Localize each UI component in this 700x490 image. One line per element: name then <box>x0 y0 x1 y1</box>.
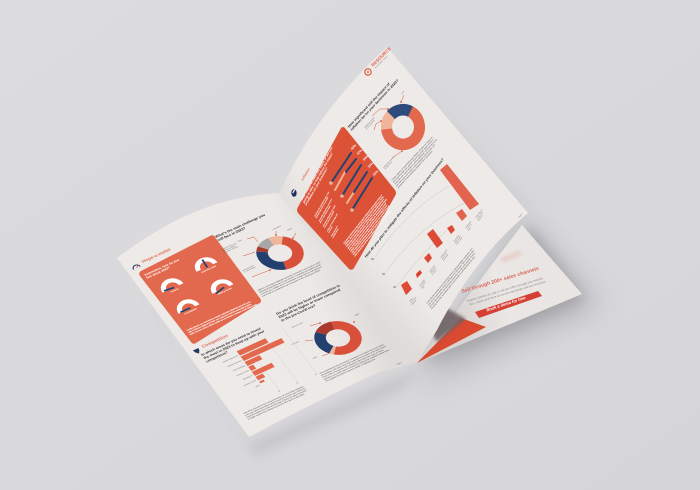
bar labels: Vehicle infrastructure <box>222 354 239 363</box>
donut labels: main challenge: across the business <box>223 245 239 254</box>
bar value labels: 31% <box>372 169 379 177</box>
right page sheet <box>279 47 528 363</box>
paragraph: competition: is the area where respondents need to invest the most this year to keep up. <box>244 387 307 417</box>
bar category labels: Using new technology and <box>326 213 338 233</box>
panel heading: Automotive, how do you <box>143 258 180 277</box>
heading: Inflation: Inflation <box>301 167 310 182</box>
advert body text: Cars, motors and more across the top listings and your franchise. <box>468 279 547 307</box>
panel body text: which should help with the cash position of many dealers in the market. <box>354 209 392 258</box>
bar value labels: 34% <box>367 161 374 169</box>
panel body text: inflation, and it is closely followed by increasing prices for customers. Using <box>344 195 384 246</box>
bar labels: offer <box>422 285 426 290</box>
back page sheet <box>417 225 582 363</box>
bar category labels: Reducing stock <box>331 225 338 237</box>
donut labels: main challenge: Inflation <box>286 227 293 232</box>
axis labels: 60 <box>315 374 318 376</box>
heading: sales channels: Sell through 200+ sales channels <box>461 266 540 295</box>
gauge: sentiment 1: Customer <box>170 287 180 293</box>
bar labels: Using new <box>465 220 472 229</box>
left page: Hope-o-meter and Competition <box>117 193 417 437</box>
panel body text: technology to improve the process of selling is also an important plan for a <box>345 198 385 248</box>
question: impact of inflation: inflation be on your business in 2023? <box>350 78 399 132</box>
bar chart: investment areas <box>218 326 318 404</box>
donut labels: level of competition: About the same <box>291 321 304 329</box>
paragraph: main challenge: and should be considered as part of any plan for the coming year ahead. <box>261 269 321 298</box>
booklet shadows <box>120 70 600 455</box>
bar labels: in the range <box>455 236 463 246</box>
bar labels: sales prices <box>455 235 462 244</box>
icon: speedometer <box>132 264 140 270</box>
bar labels: Customer service <box>243 379 257 387</box>
donut labels: main challenge: Competition <box>272 225 282 231</box>
bar labels: Vehicle price points <box>227 359 242 368</box>
paragraph: mitigation plans: is by far the most popular choice of all those who answered. Other measures were <box>427 249 475 307</box>
question: investment areas: In which areas do you need to invest <box>200 326 262 357</box>
bar labels: costs of the <box>476 211 483 220</box>
bar labels: amount of <box>441 251 448 260</box>
bar labels: tech and <box>466 223 472 230</box>
paragraph: mitigation plans: Cost reduction stands out as the primary plan for reducing inflation pressures, as it <box>426 247 473 305</box>
question: level of competition: 2023 will be higher or lower compared <box>278 288 341 319</box>
bar labels: business <box>478 215 484 222</box>
question: main challenge: What's the main challenge you <box>214 213 266 239</box>
gauge: sentiment 2: Automotive market <box>201 265 217 274</box>
bar labels: the stock <box>420 280 426 288</box>
photo thumbnail <box>431 307 466 342</box>
button: book a demo: Book a demo for free <box>486 295 527 312</box>
donut chart: level of competition <box>303 314 373 362</box>
paragraph: main challenge: a concern for a smaller share of respondents, though they are still significant <box>260 265 323 296</box>
paragraph: impact of inflation: are expecting a low impact, which suggests most firms are now <box>395 143 436 187</box>
icon: inflation <box>290 188 298 198</box>
gauge: sentiment 4: Vehicle production <box>217 287 233 296</box>
paragraph: level of competition: This suggests the market is going to remain a challenging one. <box>325 357 377 383</box>
donut labels: impact of inflation: Moderate impact on <box>383 155 395 169</box>
bar category labels: process and the workflow <box>323 209 335 229</box>
panel body text: while concerns about vehicle supply and production continue to hold them back. <box>189 303 258 336</box>
paragraph: mitigation plans: all much less favoured, with technology and prices the next most popular choices, <box>429 251 476 308</box>
axis labels: 20 <box>393 285 397 289</box>
bar labels: Improving <box>429 265 435 273</box>
bar labels <box>409 208 486 306</box>
paragraph: competition: A smaller number have selected service and other items for their plans. <box>247 392 306 421</box>
right page: Inflation <box>279 46 528 363</box>
panel body text: with confidence highest for their own customers and the dealership market, <box>187 303 252 334</box>
bar labels: Stocking and <box>242 374 253 381</box>
bar labels: stock held <box>442 253 449 262</box>
paragraph: level of competition: About a fifth of businesses feel competition will be about the same as before, <box>322 348 385 379</box>
gauge: sentiment 3: Car dealerships <box>184 307 198 315</box>
grid lines <box>375 186 468 286</box>
bar category labels: holding levels <box>332 228 339 239</box>
bar labels: planned <box>412 299 417 306</box>
question: main challenge: will face in 2023? <box>216 226 247 243</box>
bar category labels: new tools <box>328 225 333 234</box>
paragraph: mitigation plans: showing that many businesses plan to use a range of methods during the year. <box>430 255 476 310</box>
panel body text: Looking ahead, our respondents remain cautiously optimistic about the year, <box>186 300 252 332</box>
donut labels: main challenge: Access to talent and <box>221 242 237 251</box>
panel body text: margin. Changing the offer is another route that some are looking at now, <box>350 204 388 253</box>
bar category labels: Increasing sales prices across the <box>318 198 333 223</box>
bar labels: Reducing the <box>440 248 448 259</box>
button: book a demo <box>475 291 542 318</box>
donut labels: main challenge: staffing shortages <box>222 244 236 252</box>
paragraph: level of competition: Most respondents expect the level of competition to be higher than it was before <box>319 343 385 375</box>
panel body text: with reduced stock holding also being a way to lower the amount of money <box>351 204 390 254</box>
paragraph: main challenge: Inflation is the largest challenge automotive businesses expect to face in 2023, <box>257 261 322 292</box>
paragraph: impact of inflation: their business this year, and for most of them that impact will be a <box>392 138 435 184</box>
page number: 3: Page 3 <box>518 213 523 219</box>
donut labels: main challenge: Long lead times <box>242 264 255 272</box>
paragraph: competition: One of the responses to the survey that stands out is that online marketing <box>243 385 304 415</box>
page number: 2: Page 2 <box>396 362 403 366</box>
paragraph: impact of inflation: A large majority of respondents say inflation will have an impact on <box>391 136 433 182</box>
donut labels: impact of inflation: Low <box>401 90 405 95</box>
donut labels: main challenge: for new vehicles <box>244 267 256 273</box>
panel body text: tools could help to remove some of the costs that are affecting the overall <box>348 202 387 251</box>
panel body text: Operational efficiency is the most popular method for reducing the impact of <box>343 194 383 245</box>
paragraph: level of competition: the pandemic, with many citing online retail and new entrants as the main reason. <box>320 345 388 377</box>
donut chart: impact of inflation <box>380 102 426 152</box>
question: investment areas: competitors? <box>205 351 229 363</box>
donut labels: impact of inflation <box>364 90 405 170</box>
red corner shape <box>417 318 486 363</box>
question: mitigate inflation: How do you plan to mitigate the effects of inflation on your business? <box>364 157 445 259</box>
heading: Competition: Competition <box>201 333 229 349</box>
bar labels: Changing <box>419 279 425 287</box>
paragraph: main challenge: followed by long lead times for new vehicles. Competition and staffing remain <box>258 263 322 294</box>
donut labels: level of competition <box>291 313 361 360</box>
donut labels: impact of inflation: on the business <box>365 119 375 130</box>
question: level of competition: Do you think the level of competition in <box>275 284 341 316</box>
bar labels: measures <box>411 297 417 304</box>
panel heading: of inflation on your business? <box>304 166 328 207</box>
panel body text: good proportion of the respondents, and it makes sense to look at how digital <box>347 198 388 250</box>
bar labels: tools <box>467 226 472 232</box>
donut labels: impact of inflation: the business <box>384 161 393 170</box>
bar labels: Increasing <box>453 235 460 243</box>
donut labels: level of competition: Higher <box>354 313 361 317</box>
bar value labels <box>350 143 379 177</box>
panel body text: that is tied up in the business through the coming year and beyond that, <box>352 207 390 256</box>
paragraph: level of competition: whereas a very small number of businesses believe that competition will be lower. <box>323 348 391 381</box>
bar category labels: Reducing the operational costs of the <box>314 191 330 218</box>
bar category labels: whole of the vehicle range <box>319 205 331 224</box>
bar labels: Other <box>409 297 414 303</box>
panel heading: feel about 2023? <box>145 266 171 280</box>
back page: sales channels advert <box>417 225 582 363</box>
logo: RESOURCE <box>370 46 392 68</box>
bars <box>440 164 479 210</box>
donut labels: impact of inflation: Significant impact <box>364 116 375 129</box>
bar labels: Customer service <box>235 369 250 377</box>
bar labels: efficiency <box>431 267 437 274</box>
donut labels: level of competition: Lower <box>312 356 318 360</box>
panel: inflation red card <box>297 127 396 270</box>
panel heading: going to take, to help reduce the impact <box>302 152 333 204</box>
donut labels: main challenge: Other <box>237 238 243 243</box>
question: impact of inflation: How significant will the impact of <box>347 81 391 129</box>
axis labels: 20 <box>278 390 281 393</box>
panel heading: What measures have you taken, or are you <box>300 145 333 202</box>
bar labels: Online marketing <box>232 364 246 372</box>
paragraph: impact of inflation: moderate one. Some believe it will be significant, whereas only a few <box>394 138 438 185</box>
axis labels: 40 <box>382 272 386 276</box>
bar chart: mitigation plans <box>371 164 486 306</box>
donut labels: level of competition: The same <box>291 341 300 346</box>
logo <box>365 46 392 75</box>
axis labels: 40 <box>296 382 299 384</box>
bar labels: of sales <box>432 269 437 276</box>
blurred pink image hint <box>500 250 522 263</box>
icon: trophy <box>193 348 201 354</box>
bar labels: Reducing the <box>475 208 483 219</box>
bar category labels: Improving efficiency in the sales <box>322 204 336 228</box>
paragraph: competition: Stock and vehicle price points are also high on the list for many businesses. <box>246 389 308 419</box>
bar category labels: business wherever it is possible <box>315 196 329 219</box>
bar value labels: 34% <box>362 154 369 162</box>
bar labels: Other <box>255 384 261 388</box>
bar value labels: 37% <box>356 148 363 156</box>
donut labels: main challenge <box>221 225 296 277</box>
left page sheet <box>117 193 417 437</box>
donut chart: main challenge <box>245 229 315 277</box>
heading: Hope-o-meter: Hope-o-meter <box>141 247 172 264</box>
axis labels: 60 <box>371 257 375 261</box>
question: investment areas: the most in 2023 to keep up with your <box>203 329 266 360</box>
paragraph: impact of inflation: preparing for it and planning changes to their operations. <box>397 149 434 189</box>
advert body text: Register vehicles for sale on all your offers through your website, <box>466 276 544 303</box>
question: level of competition: to the pre-Covid era? <box>280 304 317 322</box>
bar chart: measures <box>330 153 372 211</box>
panel: hope-o-meter orange card <box>139 235 261 344</box>
bar value labels: 43% <box>350 143 357 151</box>
logo: Automotive report <box>374 55 389 69</box>
